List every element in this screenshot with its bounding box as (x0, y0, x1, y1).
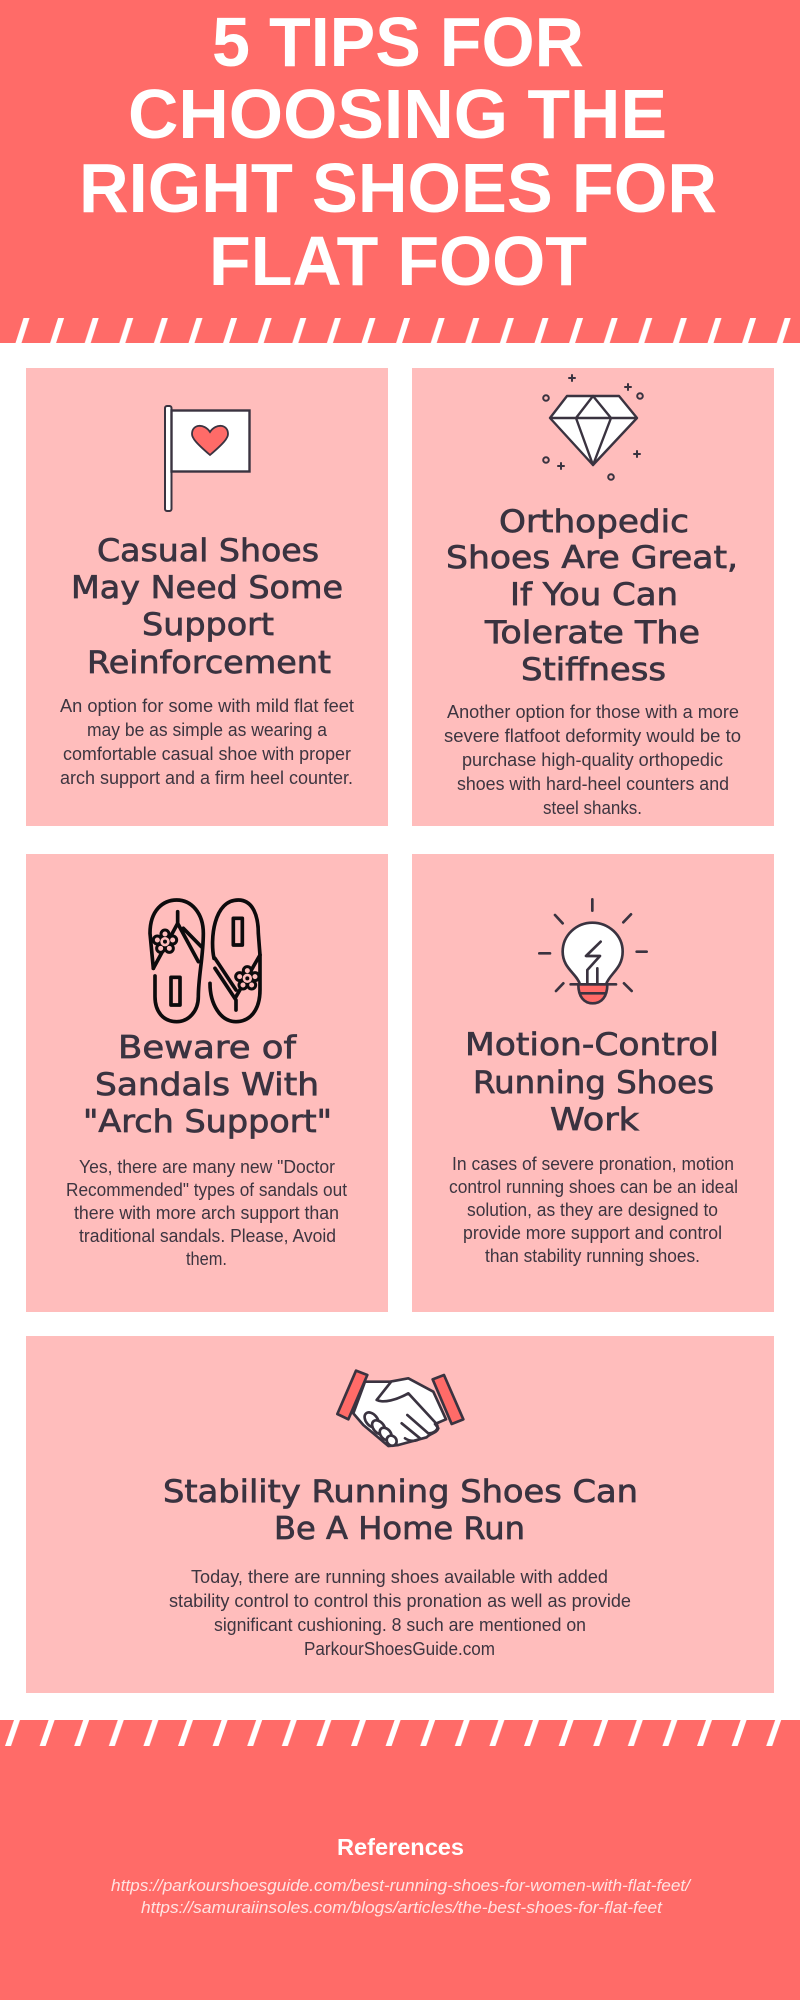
heading: motion-control shoes (465, 1027, 719, 1138)
text: casual shoes: An option for some with mild flat feet (60, 696, 354, 716)
text: motion-control shoes: provide more support and control (463, 1223, 722, 1243)
header band (0, 0, 800, 343)
panel: motion-control shoes (412, 854, 774, 1312)
title: 5 TIPS FOR (212, 3, 584, 81)
text: motion-control shoes (449, 1154, 738, 1266)
heading: stability running shoes: Be A Home Run (274, 1511, 525, 1547)
heading: sandals: Beware of (118, 1030, 297, 1066)
panel: casual shoes (26, 368, 388, 826)
heading: casual shoes: May Need Some (71, 570, 343, 606)
title (79, 3, 717, 300)
text: sandals: traditional sandals. Please, Avoid (79, 1226, 336, 1246)
heading: sandals: "Arch Support" (83, 1104, 332, 1140)
icon: handshake (337, 1371, 463, 1448)
reference links: https://parkourshoesguide.com/best-running-shoes-for-women-with-flat-feet/ (111, 1876, 692, 1895)
heading: casual shoes: Reinforcement (87, 645, 331, 681)
text: motion-control shoes: In cases of severe pronation, motion (452, 1154, 734, 1174)
icon: flag with heart (165, 406, 250, 511)
heading: orthopedic shoes: Tolerate The (484, 615, 700, 651)
title: FLAT FOOT (209, 222, 587, 300)
text: stability running shoes: stability control to control this pronation as well as provide (169, 1591, 631, 1611)
text: casual shoes: comfortable casual shoe with proper (63, 744, 351, 764)
reference links (111, 1876, 692, 1917)
heading: sandals: Sandals With (95, 1067, 319, 1103)
heading: stability running shoes (163, 1474, 638, 1547)
heading: orthopedic shoes (446, 504, 738, 688)
footer band (0, 1720, 800, 2000)
heading: motion-control shoes: Running Shoes (473, 1065, 714, 1101)
text: motion-control shoes: than stability running shoes. (485, 1246, 700, 1266)
heading: sandals (83, 1030, 332, 1140)
text: orthopedic shoes: shoes with hard-heel counters and (457, 774, 729, 794)
title: RIGHT SHOES FOR (79, 149, 717, 227)
text: motion-control shoes: solution, as they are designed to (467, 1200, 718, 1220)
heading: orthopedic shoes: Orthopedic (499, 504, 689, 540)
heading: orthopedic shoes: Shoes Are Great, (446, 540, 738, 576)
heading: casual shoes: Support (142, 607, 274, 643)
references heading: References (337, 1834, 464, 1860)
heading: casual shoes (71, 533, 343, 681)
text: motion-control shoes: control running shoes can be an ideal (449, 1177, 738, 1197)
heading: motion-control shoes: Work (550, 1102, 639, 1138)
title: CHOOSING THE (128, 75, 667, 153)
text: orthopedic shoes: Another option for those with a more (447, 702, 739, 722)
panel: orthopedic shoes (412, 368, 774, 826)
reference links: https://samuraiinsoles.com/blogs/articles/the-best-shoes-for-flat-feet (141, 1898, 663, 1917)
text: sandals: there with more arch support than (74, 1203, 339, 1223)
panel: sandals (26, 854, 388, 1312)
text: sandals: them. (186, 1249, 227, 1269)
icon: flip-flops (150, 900, 260, 1022)
text: stability running shoes: ParkourShoesGuide.com (304, 1639, 495, 1659)
icon: light bulb (539, 899, 647, 1003)
text: stability running shoes (169, 1567, 631, 1659)
text: casual shoes (60, 696, 354, 788)
text: orthopedic shoes (444, 702, 741, 818)
text: stability running shoes: significant cushioning. 8 such are mentioned on (214, 1615, 586, 1635)
text: stability running shoes: Today, there are running shoes available with added (191, 1567, 608, 1587)
text: orthopedic shoes: purchase high-quality orthopedic (462, 750, 723, 770)
heading: orthopedic shoes: If You Can (510, 577, 678, 613)
text: sandals (66, 1157, 347, 1269)
heading: motion-control shoes: Motion-Control (465, 1027, 719, 1063)
heading: stability running shoes: Stability Running Shoes Can (163, 1474, 638, 1510)
text: sandals: Yes, there are many new "Doctor (79, 1157, 335, 1177)
panel: stability running shoes (26, 1336, 774, 1693)
heading: orthopedic shoes: Stiffness (521, 652, 666, 688)
text: sandals: Recommended" types of sandals out (66, 1180, 347, 1200)
heading: casual shoes: Casual Shoes (97, 533, 319, 569)
text: orthopedic shoes: steel shanks. (543, 798, 642, 818)
text: casual shoes: arch support and a firm heel counter. (60, 768, 353, 788)
icon: diamond (543, 375, 643, 480)
text: orthopedic shoes: severe flatfoot deformity would be to (444, 726, 741, 746)
text: casual shoes: may be as simple as wearing a (87, 720, 328, 740)
